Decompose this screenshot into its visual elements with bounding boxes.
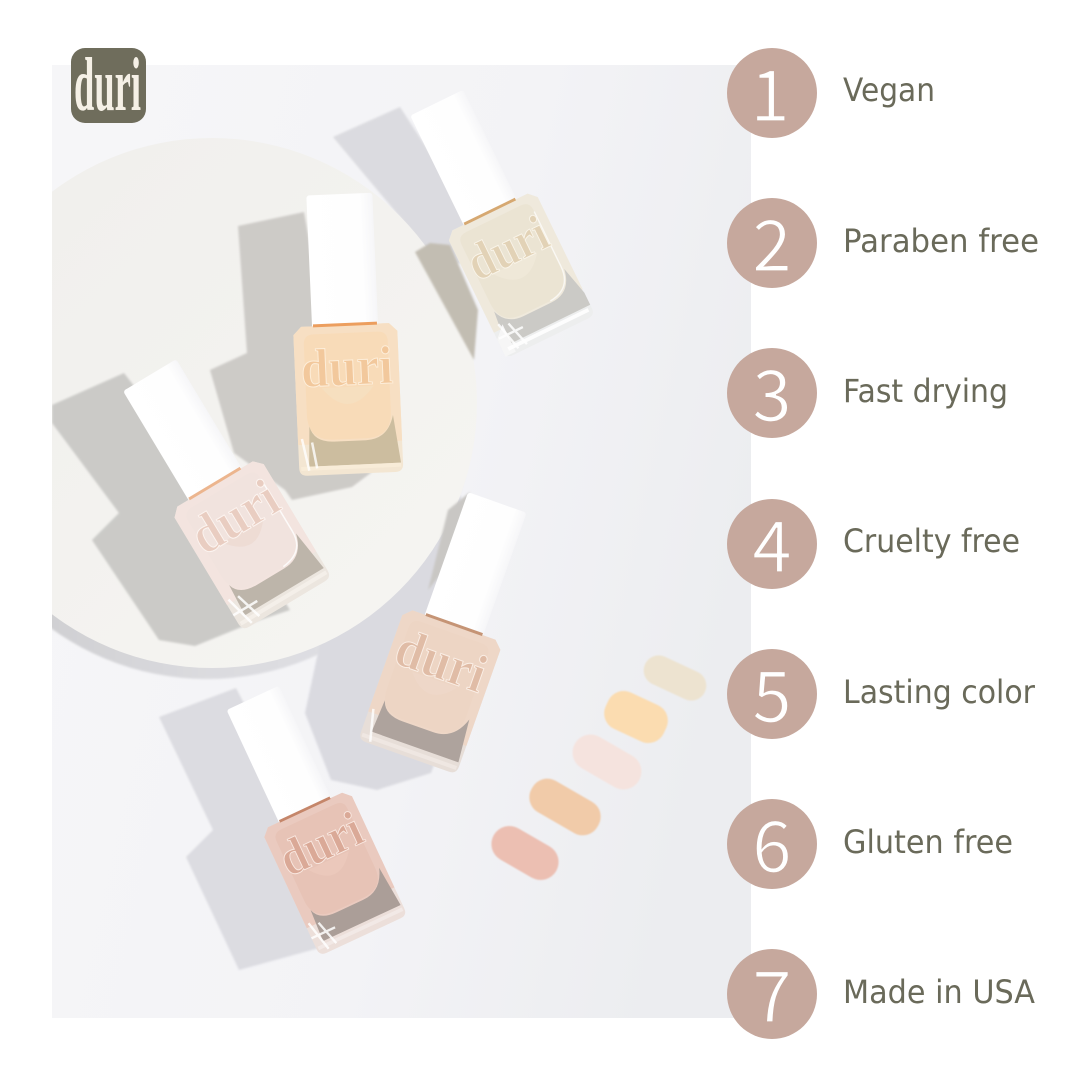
feature 4: cruelty free: 4	[752, 491, 792, 593]
feature 1: vegan: Vegan	[843, 71, 935, 109]
swatch: pale pink	[572, 734, 642, 790]
embossed logo: duri	[180, 467, 289, 566]
feature 4: cruelty free: Cruelty free	[843, 522, 1020, 560]
shadow: bottle 4 on panel	[304, 496, 462, 790]
bottle: rosy nude (bottom left)	[228, 690, 406, 954]
feature 7: made in usa	[727, 941, 1035, 1043]
panel: product photo	[0, 65, 751, 1018]
logo: duri	[71, 43, 146, 127]
bottle: beige (right)	[360, 493, 521, 772]
logo: duri: duri	[74, 43, 141, 127]
embossed logo: duri	[300, 335, 394, 399]
shadow: bottle 3 on disc	[415, 243, 478, 360]
bottle: peach (centre)	[287, 192, 403, 476]
feature 2: paraben free: 2	[752, 190, 792, 292]
white round disc	[52, 138, 472, 668]
shadow: bottle 2 on disc	[210, 212, 372, 500]
feature 5: lasting color: Lasting color	[843, 673, 1036, 711]
feature 5: lasting color	[727, 641, 1036, 743]
embossed logo: duri	[388, 617, 495, 704]
feature 3: fast drying: 3	[752, 340, 792, 442]
feature 3: fast drying: Fast drying	[843, 372, 1008, 410]
feature 3: fast drying	[727, 340, 1008, 442]
feature 1: vegan	[727, 40, 935, 142]
swatch: cream	[643, 655, 706, 701]
disc shadow	[52, 614, 320, 680]
bottle: pale pink (left)	[124, 360, 329, 628]
feature 7: made in usa: Made in USA	[843, 973, 1035, 1011]
feature 7: made in usa: 7	[752, 941, 792, 1043]
swatch: peach	[604, 690, 668, 744]
bottle: cream (top right)	[412, 94, 590, 350]
feature 4: cruelty free	[727, 491, 1020, 593]
feature 2: paraben free: Paraben free	[843, 222, 1039, 260]
swatch: rosy	[490, 825, 560, 881]
feature 6: gluten free: 6	[752, 791, 792, 893]
feature 2: paraben free	[727, 190, 1039, 292]
shadow: bottle 1 on disc	[52, 373, 290, 646]
feature 1: vegan: 1	[750, 40, 790, 142]
shadow: bottle 4 on disc	[428, 492, 470, 590]
swatch: tan	[528, 778, 602, 836]
feature 5: lasting color: 5	[752, 641, 792, 743]
feature 6: gluten free	[727, 791, 1013, 893]
embossed logo: duri	[458, 204, 558, 292]
embossed logo: duri	[270, 800, 371, 887]
colour swatches	[485, 650, 711, 887]
shadow: bottle 3 on panel	[334, 107, 464, 264]
shadow: bottle 5 on panel	[159, 688, 330, 970]
feature 6: gluten free: Gluten free	[843, 823, 1013, 861]
